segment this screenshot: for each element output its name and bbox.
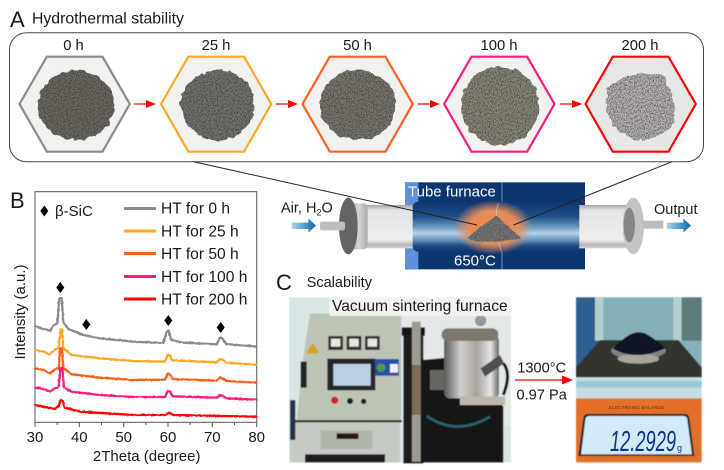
label: Vacuum sintering furnace: Vacuum sintering furnace — [332, 298, 508, 315]
legend: series: HT for 100 h — [161, 269, 247, 286]
heading: Scalability: Scalability — [307, 275, 373, 291]
sample: 50 h: 50 h — [343, 38, 372, 54]
chart: XRD patterns — [12, 192, 265, 465]
legend: beta-SiC marker: β-SiC — [55, 203, 93, 220]
sample: 100 h — [444, 38, 554, 152]
x axis tick labels: 40 — [71, 429, 88, 446]
label: 650 C: 650°C — [454, 253, 496, 270]
process arrow with conditions — [515, 361, 573, 403]
label: Air, H2O: 2 — [316, 208, 321, 218]
balance readout: 12.2929 — [610, 426, 676, 458]
legend: series: HT for 0 h — [161, 200, 230, 218]
label: Output: Output — [654, 202, 698, 218]
peak markers — [56, 282, 225, 333]
process arrow with conditions: 1300°C — [517, 361, 566, 377]
x axis tick labels — [27, 429, 265, 446]
arrow — [560, 100, 582, 108]
legend: series: HT for 200 h — [161, 292, 247, 308]
sample: 25 h: 25 h — [202, 38, 230, 54]
x axis tick labels: 60 — [160, 429, 176, 446]
sample: 50 h — [302, 38, 413, 152]
heading: Hydrothermal stability: Hydrothermal stability — [32, 10, 184, 28]
sample: 200 h: 200 h — [621, 38, 659, 54]
photo: vacuum sintering furnace — [289, 297, 511, 463]
sample: 0 h — [20, 38, 130, 152]
x axis tick labels: 80 — [248, 429, 265, 446]
photo content — [289, 297, 511, 463]
x axis tick labels: 30 — [27, 429, 43, 446]
panel label: B: B — [10, 188, 25, 213]
sample: 100 h: 100 h — [480, 38, 518, 54]
photo content — [576, 297, 702, 462]
legend: series — [124, 200, 247, 308]
panel label: C: C — [276, 270, 292, 295]
label: Air, H2O: O — [321, 201, 333, 217]
x axis tick labels: 50 — [115, 429, 132, 446]
arrow — [134, 100, 156, 108]
callout lines from samples to furnace — [194, 162, 672, 225]
arrow — [418, 100, 440, 108]
panel: hydrothermal stability samples — [10, 33, 704, 162]
curves — [35, 298, 257, 417]
panel label: A: A — [10, 7, 25, 32]
arrow — [276, 100, 298, 108]
plot frame and ticks — [35, 192, 257, 427]
sample: 200 h — [586, 38, 696, 152]
legend: series: HT for 25 h — [161, 224, 239, 240]
diagram: tube furnace — [281, 182, 698, 270]
panel outline — [10, 33, 704, 162]
balance unit: g — [677, 443, 682, 453]
furnace drawing — [292, 182, 691, 269]
process arrow with conditions: 0.97 Pa — [516, 387, 568, 403]
y axis title: Intensity (a.u.) — [12, 264, 29, 360]
x axis tick labels: 70 — [204, 429, 221, 446]
balance header text: ELECTRONIC BALANCE — [609, 405, 664, 410]
sample: 0 h: 0 h — [63, 38, 84, 54]
photo: electronic balance — [576, 297, 702, 462]
legend: series: HT for 50 h — [161, 246, 239, 263]
label: Tube furnace: Tube furnace — [408, 184, 496, 201]
label: Air, H2O: Air, H — [281, 201, 316, 217]
sample: 25 h — [161, 38, 271, 152]
x axis title: 2Theta (degree) — [93, 448, 200, 465]
